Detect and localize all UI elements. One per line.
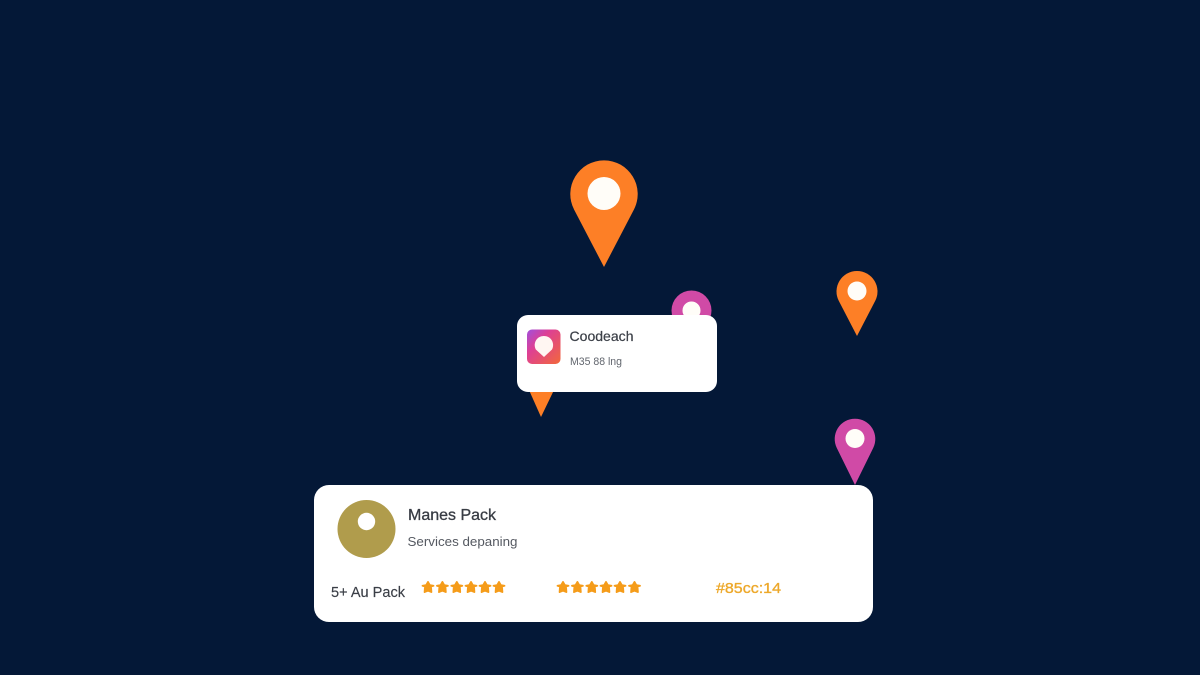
star rating: second group	[558, 582, 640, 592]
panel: small location card	[517, 315, 717, 392]
icon: orange map pin tip behind small card	[529, 390, 554, 417]
panel: large listing card	[314, 485, 873, 622]
listing subtitle: Services depaning	[408, 534, 518, 549]
pack label: 5+ Au Pack	[331, 585, 406, 601]
icon: large orange map pin	[570, 160, 638, 267]
icon: magenta map pin behind small card	[672, 290, 712, 330]
card title: Coodeach	[570, 328, 634, 344]
icon: app logo with gradient	[527, 330, 560, 364]
icon: gold avatar circle	[338, 500, 396, 558]
star rating: first group	[422, 582, 504, 592]
card subtitle: M35 88 lng	[570, 356, 622, 368]
listing title: Manes Pack	[408, 507, 496, 524]
icon: magenta map pin right	[835, 419, 875, 485]
colour code value: #85cc:14	[716, 580, 781, 597]
icon: small orange map pin right	[836, 271, 878, 336]
